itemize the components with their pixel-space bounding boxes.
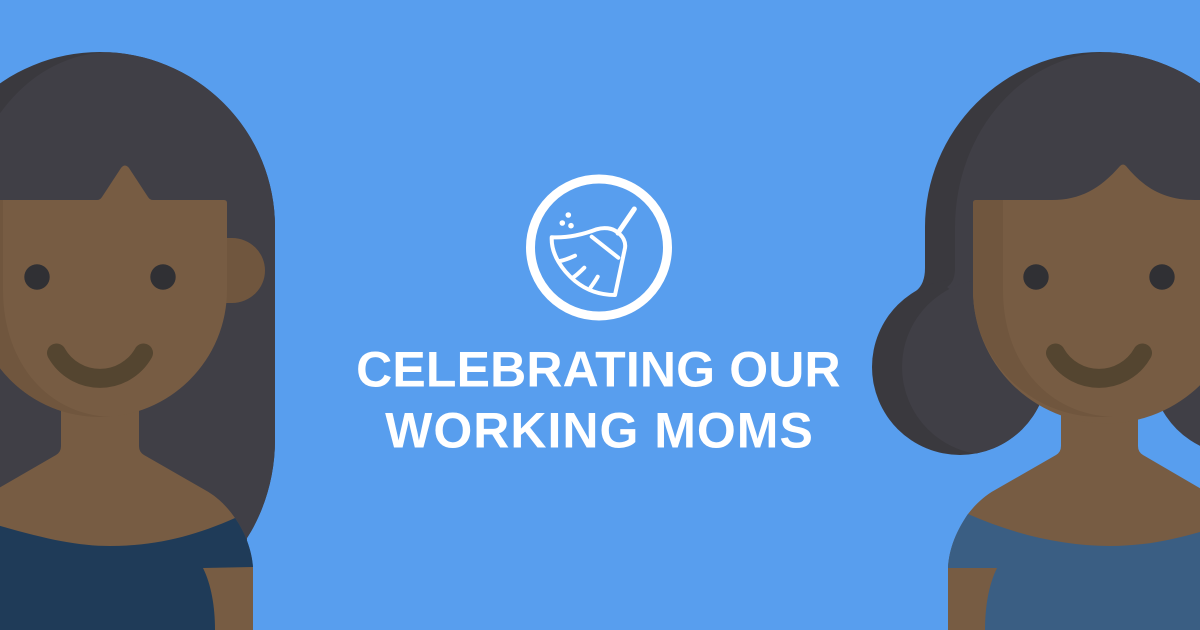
right woman body and shoulders [948,410,1200,630]
left woman ear [226,238,265,303]
left woman smile [56,353,144,378]
right woman shirt [948,514,1200,630]
left woman hair [0,52,275,630]
left woman body and shoulders [0,410,253,630]
left woman illustration [0,52,275,630]
left woman shirt [0,518,253,630]
icon: broom in circle [530,179,668,316]
right woman hair and buns [872,52,1200,455]
right woman face [973,164,1200,423]
title: CELEBRATING OUR [356,342,841,398]
right woman eyes [1023,264,1175,290]
title: WORKING MOMS [385,402,814,458]
right woman smile [1056,353,1142,378]
left woman face [0,166,227,417]
right woman illustration [872,52,1200,630]
left woman eyes [24,264,176,290]
title [356,342,841,458]
